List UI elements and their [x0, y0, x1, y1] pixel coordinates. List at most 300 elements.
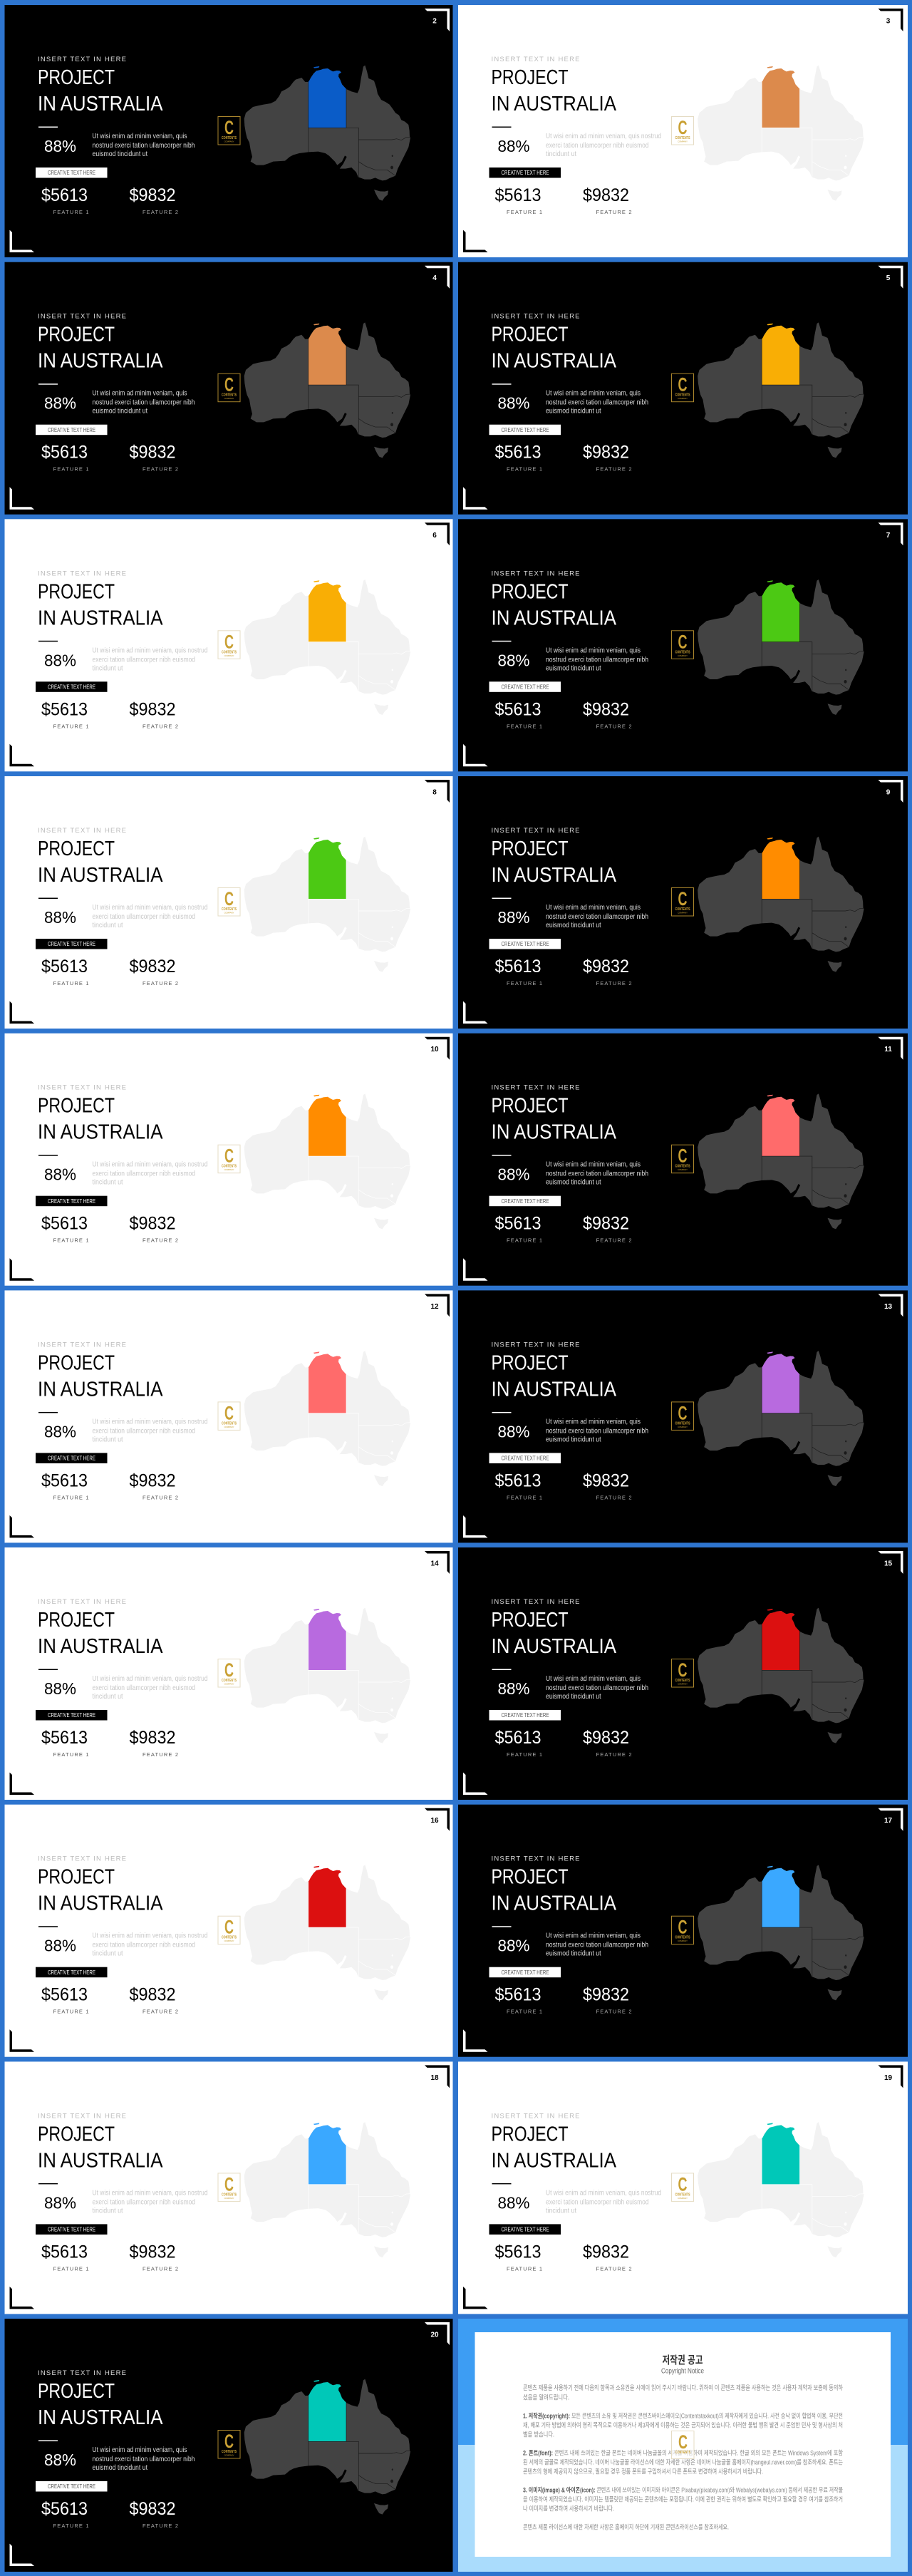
body text: tincidunt ut — [546, 150, 576, 158]
title: IN AUSTRALIA — [38, 1378, 163, 1401]
eyebrow: INSERT TEXT IN HERE — [492, 2112, 580, 2120]
corner bracket top right — [878, 522, 903, 545]
title: IN AUSTRALIA — [38, 2149, 163, 2172]
corner bracket bottom left — [463, 487, 487, 510]
feature 2 value — [130, 1214, 178, 1244]
corner bracket top right — [878, 2065, 903, 2088]
panel: slide 4 dark — [4, 262, 453, 515]
logo: COMPANY — [224, 1168, 234, 1171]
notice section 1 — [523, 2411, 843, 2438]
corner bracket bottom left — [10, 1001, 34, 1024]
corner bracket top right — [878, 9, 903, 31]
title: PROJECT — [492, 1351, 569, 1374]
body text: Ut wisi enim ad minim veniam, quis — [546, 1674, 641, 1683]
title: IN AUSTRALIA — [38, 350, 163, 373]
panel: slide 12 light — [4, 1290, 453, 1542]
eyebrow: INSERT TEXT IN HERE — [38, 1855, 126, 1863]
body text: nostrud exerci tation ullamcorper nibh — [93, 2455, 195, 2463]
title: PROJECT — [38, 2123, 115, 2145]
page number: 14 — [430, 1560, 439, 1568]
eyebrow: INSERT TEXT IN HERE — [38, 2112, 126, 2120]
corner bracket bottom left — [10, 2544, 34, 2566]
logo: C — [678, 2431, 688, 2453]
logo: C — [224, 374, 234, 396]
logo: CONTENTS — [222, 907, 237, 912]
title: PROJECT — [492, 1609, 569, 1632]
logo: COMPANY — [678, 654, 688, 657]
title: IN AUSTRALIA — [492, 864, 617, 887]
corner bracket top right — [878, 1037, 903, 1060]
logo: CONTENTS — [222, 1421, 237, 1426]
feature 2 value — [130, 2242, 178, 2272]
feature 1 value: $5613 — [41, 957, 88, 977]
eyebrow: INSERT TEXT IN HERE — [38, 2369, 126, 2377]
body text — [93, 389, 195, 416]
body text: euismod tincidunt ut — [546, 1435, 601, 1443]
body text: Ut wisi enim ad minim veniam, quis — [546, 1160, 641, 1169]
title: IN AUSTRALIA — [38, 1635, 163, 1658]
logo: CONTENTS — [222, 1936, 237, 1940]
feature 1 value: $5613 — [494, 1214, 542, 1234]
body text: Ut wisi enim ad minim veniam, quis nostrud — [546, 132, 661, 140]
body text — [546, 1160, 648, 1187]
title: PROJECT — [492, 66, 569, 89]
logo — [671, 1916, 694, 1944]
button label — [489, 1710, 561, 1721]
feature 2 value: $9832 — [130, 2242, 175, 2262]
feature 1 value — [41, 2242, 88, 2272]
logo: CONTENTS — [222, 650, 237, 654]
body text: tincidunt ut — [93, 921, 123, 929]
body text: Ut wisi enim ad minim veniam, quis — [546, 646, 641, 654]
feature 2 value — [130, 699, 178, 729]
panel: copyright notice — [458, 2319, 908, 2572]
map of Australia — [698, 837, 864, 972]
panel: slide 7 dark — [458, 519, 908, 771]
title: IN AUSTRALIA — [38, 93, 163, 115]
logo: C — [678, 374, 687, 396]
feature 2 value — [130, 1728, 178, 1758]
body text: Ut wisi enim ad minim veniam, quis — [546, 903, 641, 912]
eyebrow: INSERT TEXT IN HERE — [492, 56, 580, 63]
panel: slide 19 light — [458, 2061, 908, 2314]
percent stat: 88% — [44, 908, 76, 927]
button label: CREATIVE TEXT HERE — [502, 1712, 549, 1719]
button label — [489, 1196, 561, 1206]
eyebrow: INSERT TEXT IN HERE — [492, 570, 580, 577]
button label — [489, 939, 561, 949]
percent stat: 88% — [497, 2193, 530, 2212]
page number: 11 — [884, 1046, 892, 1053]
notice title: 저작권 공고 — [663, 2354, 703, 2366]
title: PROJECT — [38, 66, 115, 89]
feature 2 value: FEATURE 2 — [142, 466, 178, 473]
logo: CONTENTS — [675, 907, 690, 912]
logo: COMPANY — [678, 1168, 688, 1171]
logo: COMPANY — [678, 1682, 688, 1685]
eyebrow: INSERT TEXT IN HERE — [38, 56, 126, 63]
feature 1 value: $5613 — [494, 957, 542, 977]
logo — [671, 631, 694, 659]
button label: CREATIVE TEXT HERE — [48, 941, 95, 947]
logo — [671, 1659, 694, 1687]
feature 2 value — [583, 1985, 631, 2015]
panel: slide 16 light — [4, 1805, 453, 2057]
eyebrow: INSERT TEXT IN HERE — [492, 1084, 580, 1092]
button label — [489, 681, 561, 692]
feature 1 value: FEATURE 1 — [507, 209, 542, 215]
feature 1 value: $5613 — [494, 2242, 542, 2262]
logo: COMPANY — [224, 1426, 234, 1428]
feature 1 value: $5613 — [41, 2242, 88, 2262]
notice section 3: 나 이미지를 변경하여 사용하시기 바랍니다. — [523, 2504, 614, 2512]
logo: C — [678, 117, 687, 138]
page number: 15 — [884, 1560, 892, 1568]
button label — [36, 681, 107, 692]
title — [492, 1609, 617, 1658]
logo: COMPANY — [224, 1682, 234, 1685]
panel: slide 9 dark — [458, 776, 908, 1029]
feature 1 value — [41, 699, 88, 729]
panel: slide 8 light — [4, 776, 453, 1029]
feature 1 value: FEATURE 1 — [507, 723, 542, 729]
feature 1 value: $5613 — [41, 1214, 88, 1234]
feature 1 value: $5613 — [494, 1728, 542, 1748]
body text: exerci tation ullamcorper nibh euismod — [93, 2198, 195, 2206]
body text — [546, 903, 648, 929]
page number: 12 — [430, 1303, 439, 1311]
logo — [671, 373, 694, 402]
button label: CREATIVE TEXT HERE — [48, 2227, 95, 2233]
logo: COMPANY — [678, 2197, 688, 2200]
title — [38, 2123, 163, 2172]
logo: CONTENTS — [675, 2193, 690, 2197]
panel: slide 20 dark — [4, 2319, 453, 2572]
feature 1 value — [494, 443, 542, 473]
logo: C — [678, 888, 687, 910]
feature 1 value: $5613 — [494, 1985, 542, 2005]
corner bracket top right — [878, 1294, 903, 1317]
notice section 2: 2. 폰트(font): 콘텐츠 내에 쓰여있는 한글 폰트는 네이버 나눔글꼴의 서체를 이용하여 제작되었습니다. 한글 외의 모든 폰트는 Windows System에 포함 — [523, 2449, 843, 2457]
feature 2 value: $9832 — [130, 1985, 175, 2005]
corner bracket bottom left — [463, 2287, 487, 2309]
button label — [36, 425, 107, 435]
title: IN AUSTRALIA — [38, 1121, 163, 1144]
panel: slide 3 light — [458, 5, 908, 257]
title — [38, 324, 163, 373]
body text: nostrud exerci tation ullamcorper nibh — [546, 1684, 648, 1692]
body text: Ut wisi enim ad minim veniam, quis nostrud — [93, 1674, 208, 1683]
percent stat: 88% — [44, 651, 76, 669]
logo: CONTENTS — [222, 1165, 237, 1169]
title: PROJECT — [492, 2123, 569, 2145]
feature 1 value — [494, 2242, 542, 2272]
feature 2 value — [130, 185, 178, 215]
map of Australia — [244, 1093, 410, 1229]
feature 1 value — [494, 699, 542, 729]
feature 2 value — [583, 699, 631, 729]
page number: 7 — [886, 532, 891, 540]
logo — [671, 2173, 694, 2201]
panel: slide 11 dark — [458, 1034, 908, 1286]
button label: CREATIVE TEXT HERE — [502, 1456, 549, 1462]
page number: 2 — [432, 17, 437, 26]
button label: CREATIVE TEXT HERE — [48, 1198, 95, 1205]
logo: C — [224, 1145, 234, 1167]
feature 1 value: $5613 — [494, 1470, 542, 1490]
corner bracket top right — [425, 2065, 450, 2088]
corner bracket top right — [425, 1037, 450, 1060]
feature 1 value: $5613 — [494, 443, 542, 463]
eyebrow: INSERT TEXT IN HERE — [492, 1598, 580, 1606]
map of Australia — [244, 1608, 410, 1743]
corner bracket bottom left — [463, 2029, 487, 2052]
button label: CREATIVE TEXT HERE — [502, 170, 549, 176]
feature 2 value — [130, 957, 178, 986]
button label — [489, 425, 561, 435]
button label — [36, 2481, 107, 2492]
title — [38, 838, 163, 887]
feature 1 value: FEATURE 1 — [53, 2523, 88, 2529]
title: PROJECT — [38, 324, 115, 346]
feature 1 value: FEATURE 1 — [507, 1494, 542, 1500]
body text — [546, 646, 648, 672]
logo — [218, 2173, 240, 2201]
feature 1 value: $5613 — [41, 185, 88, 205]
page number: 18 — [430, 2074, 439, 2082]
feature 1 value — [494, 1728, 542, 1758]
eyebrow: INSERT TEXT IN HERE — [492, 827, 580, 835]
body text: Ut wisi enim ad minim veniam, quis — [93, 389, 187, 398]
feature 2 value: $9832 — [583, 443, 629, 463]
feature 2 value: FEATURE 2 — [596, 2009, 631, 2015]
feature 2 value: $9832 — [583, 699, 629, 719]
body text — [93, 1674, 208, 1701]
feature 2 value: FEATURE 2 — [142, 1237, 178, 1244]
eyebrow: INSERT TEXT IN HERE — [38, 1084, 126, 1092]
corner bracket top right — [425, 522, 450, 545]
map of Australia — [244, 837, 410, 972]
logo: C — [678, 2173, 687, 2195]
body text: Ut wisi enim ad minim veniam, quis — [546, 1932, 641, 1940]
logo — [218, 373, 240, 402]
feature 1 value: $5613 — [41, 443, 88, 463]
eyebrow: INSERT TEXT IN HERE — [38, 827, 126, 835]
body text: tincidunt ut — [93, 1949, 123, 1958]
page number: 9 — [886, 788, 891, 797]
page number: 6 — [432, 532, 437, 540]
feature 2 value: FEATURE 2 — [142, 1494, 178, 1500]
feature 2 value: $9832 — [130, 1728, 175, 1748]
feature 1 value: FEATURE 1 — [507, 2009, 542, 2015]
logo: COMPANY — [224, 1939, 234, 1942]
button label — [36, 939, 107, 949]
title — [492, 1866, 617, 1915]
logo — [671, 1402, 694, 1430]
logo: C — [224, 888, 234, 910]
body text: Ut wisi enim ad minim veniam, quis — [546, 389, 641, 398]
logo: CONTENTS — [675, 2451, 691, 2455]
feature 2 value — [130, 2499, 178, 2529]
corner bracket bottom left — [10, 744, 34, 766]
feature 2 value: FEATURE 2 — [142, 2009, 178, 2015]
percent stat: 88% — [44, 137, 76, 155]
feature 2 value — [130, 1470, 178, 1500]
logo: CONTENTS — [222, 2193, 237, 2197]
title: IN AUSTRALIA — [492, 1892, 617, 1915]
button label: CREATIVE TEXT HERE — [48, 1712, 95, 1719]
corner bracket top right — [425, 9, 450, 31]
notice section 1: 벌을 받습니다. — [523, 2431, 554, 2438]
feature 2 value — [130, 443, 178, 473]
body text — [93, 2188, 208, 2215]
feature 2 value: FEATURE 2 — [142, 980, 178, 986]
map of Australia — [244, 66, 410, 201]
body text — [93, 1160, 208, 1187]
corner bracket top right — [878, 266, 903, 289]
body text: exerci tation ullamcorper nibh euismod — [93, 1941, 195, 1949]
body text — [93, 1932, 208, 1958]
logo — [671, 117, 694, 145]
title — [38, 1609, 163, 1658]
body text — [546, 2188, 661, 2215]
corner bracket top right — [425, 2322, 450, 2345]
body text: Ut wisi enim ad minim veniam, quis — [546, 1417, 641, 1426]
logo: C — [678, 631, 687, 652]
feature 2 value: FEATURE 2 — [596, 466, 631, 473]
feature 1 value: $5613 — [41, 1728, 88, 1748]
feature 2 value: FEATURE 2 — [142, 209, 178, 215]
logo: CONTENTS — [222, 2450, 237, 2454]
page number: 13 — [884, 1303, 892, 1311]
page number: 20 — [430, 2331, 439, 2339]
feature 1 value: $5613 — [41, 2499, 88, 2519]
page number: 5 — [886, 274, 891, 282]
title — [38, 66, 163, 115]
map of Australia — [244, 1351, 410, 1486]
panel: slide 6 light — [4, 519, 453, 771]
button label: CREATIVE TEXT HERE — [502, 1198, 549, 1205]
feature 2 value: $9832 — [583, 1985, 629, 2005]
logo: C — [678, 1659, 687, 1681]
feature 1 value — [41, 1985, 88, 2015]
body text: nostrud exerci tation ullamcorper nibh — [546, 1941, 648, 1949]
title — [38, 1866, 163, 1915]
feature 1 value: FEATURE 1 — [53, 2009, 88, 2015]
button label — [489, 2224, 561, 2235]
percent stat: 88% — [44, 394, 76, 413]
map of Australia — [698, 1351, 864, 1486]
percent stat: 88% — [44, 1679, 76, 1698]
logo: COMPANY — [224, 2453, 234, 2456]
map of Australia — [244, 322, 410, 458]
button label: CREATIVE TEXT HERE — [502, 2227, 549, 2233]
feature 2 value: $9832 — [583, 2242, 629, 2262]
logo: COMPANY — [678, 1426, 688, 1428]
corner bracket top right — [425, 780, 450, 803]
logo: C — [224, 1402, 234, 1423]
feature 1 value: FEATURE 1 — [507, 1751, 542, 1758]
body text: euismod tincidunt ut — [93, 407, 147, 416]
logo: COMPANY — [678, 140, 688, 143]
logo: CONTENTS — [675, 136, 690, 140]
feature 1 value: FEATURE 1 — [53, 1494, 88, 1500]
logo: COMPANY — [224, 911, 234, 914]
corner bracket top right — [425, 1551, 450, 1574]
button label — [36, 2224, 107, 2235]
feature 2 value — [583, 1728, 631, 1758]
body text — [93, 132, 195, 158]
percent stat: 88% — [44, 1937, 76, 1955]
feature 1 value: $5613 — [41, 1985, 88, 2005]
feature 2 value: $9832 — [130, 1214, 175, 1234]
eyebrow: INSERT TEXT IN HERE — [492, 1855, 580, 1863]
logo: C — [678, 1402, 687, 1423]
title — [38, 2380, 163, 2429]
feature 1 value: FEATURE 1 — [53, 209, 88, 215]
body text — [546, 132, 661, 158]
button label — [489, 1453, 561, 1463]
title: IN AUSTRALIA — [492, 1378, 617, 1401]
button label: CREATIVE TEXT HERE — [48, 170, 95, 176]
panel: slide 2 dark — [4, 5, 453, 257]
title: PROJECT — [38, 1095, 115, 1118]
button label — [36, 1967, 107, 1977]
body text: euismod tincidunt ut — [546, 407, 601, 416]
button label: CREATIVE TEXT HERE — [48, 1969, 95, 1976]
map of Australia — [698, 322, 864, 458]
body text: tincidunt ut — [93, 1692, 123, 1701]
feature 2 value: FEATURE 2 — [142, 2523, 178, 2529]
notice subtitle: Copyright Notice — [661, 2368, 704, 2375]
logo: COMPANY — [224, 2197, 234, 2200]
corner bracket top right — [425, 1808, 450, 1831]
feature 2 value — [130, 1985, 178, 2015]
title: IN AUSTRALIA — [38, 2406, 163, 2429]
body text: nostrud exerci tation ullamcorper nibh — [546, 1426, 648, 1435]
title — [492, 2123, 617, 2172]
percent stat: 88% — [44, 1422, 76, 1441]
corner bracket bottom left — [10, 1515, 34, 1537]
body text: Ut wisi enim ad minim veniam, quis nostrud — [546, 2188, 661, 2197]
corner bracket bottom left — [463, 1258, 487, 1281]
feature 2 value: $9832 — [583, 957, 629, 977]
map of Australia — [244, 2379, 410, 2515]
map of Australia — [698, 1865, 864, 2000]
feature 1 value — [494, 1214, 542, 1244]
logo — [671, 1145, 694, 1173]
corner bracket top right — [878, 780, 903, 803]
title: PROJECT — [492, 1095, 569, 1118]
body text: tincidunt ut — [93, 1435, 123, 1443]
feature 1 value — [41, 185, 88, 215]
button label — [36, 1196, 107, 1206]
logo — [218, 1916, 240, 1944]
feature 1 value — [41, 1214, 88, 1244]
panel: slide 15 dark — [458, 1547, 908, 1800]
body text: nostrud exerci tation ullamcorper nibh — [546, 398, 648, 407]
feature 2 value: FEATURE 2 — [142, 723, 178, 729]
page number: 4 — [432, 274, 437, 282]
logo: C — [678, 1917, 687, 1938]
body text: exerci tation ullamcorper nibh euismod — [93, 1170, 195, 1178]
title: PROJECT — [38, 1866, 115, 1889]
notice section 2 — [523, 2449, 843, 2475]
body text: exerci tation ullamcorper nibh euismod — [93, 912, 195, 921]
feature 1 value: $5613 — [494, 699, 542, 719]
logo — [671, 888, 694, 916]
feature 2 value — [583, 185, 631, 215]
